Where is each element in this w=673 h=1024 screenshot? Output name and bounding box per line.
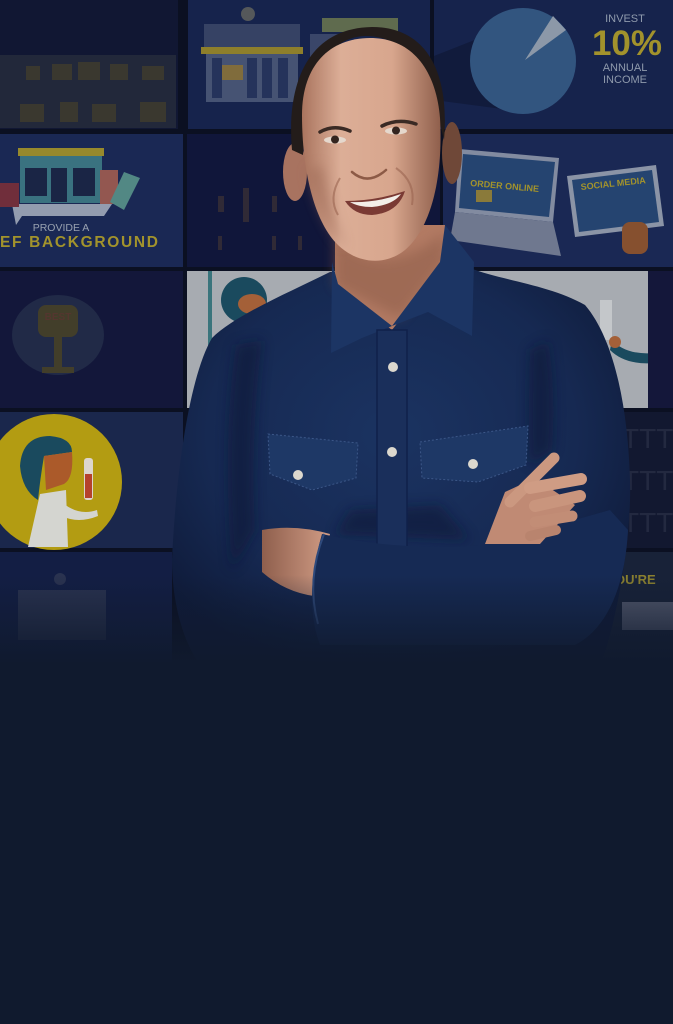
pocket left: [268, 434, 358, 490]
tile: right pattern: [620, 412, 673, 548]
placket: [377, 330, 407, 640]
tile: best rose trophy: BEST: [45, 312, 71, 323]
tile: order online and social media: SOCIAL MEDIA: [580, 175, 647, 192]
tile: you're: OU'RE: [615, 572, 656, 587]
neck: [335, 225, 445, 330]
tile: invest 10 percent: 10%: [592, 24, 662, 63]
crossed sleeve: [312, 510, 628, 645]
solid lower panel: [0, 665, 673, 1024]
nose: [352, 170, 386, 179]
shirt body: [172, 268, 630, 665]
tile: order online and social media: [443, 134, 673, 267]
tile: scientist on yellow circle: [0, 412, 183, 550]
tile: provide a brief background: [0, 134, 183, 267]
right hand: [485, 458, 581, 544]
tile: restaurant buildings: [188, 0, 430, 129]
tile: right pattern: TTT: [622, 507, 673, 538]
tile: invest 10 percent: INCOME: [603, 74, 647, 86]
left forearm hand: [262, 528, 330, 596]
collar left: [331, 262, 392, 353]
smile lines: [333, 168, 413, 215]
tile: light office scene: [187, 271, 673, 408]
eyes: [324, 126, 407, 144]
tile: you're: [600, 552, 673, 662]
hair: [291, 27, 445, 155]
tile: right pattern: TTT: [622, 465, 673, 496]
tile: right pattern: TTT: [622, 423, 673, 454]
tile: order online and social media: ORDER ONLINE: [470, 178, 539, 194]
bottom fade: [0, 575, 673, 665]
face: [302, 38, 441, 261]
snap buttons: [293, 362, 478, 480]
tile: invest 10 percent: [434, 0, 673, 129]
cheek shading: [308, 165, 345, 248]
ear right: [442, 122, 462, 184]
video tile wall: [0, 0, 673, 662]
man: [172, 27, 630, 665]
tile: invest 10 percent: ANNUAL: [603, 62, 647, 74]
tile: invest 10 percent: INVEST: [605, 13, 645, 25]
ear left: [283, 143, 307, 201]
tile: best rose trophy: [0, 271, 183, 408]
tile: faded building: [0, 552, 172, 662]
tile: provide a brief background: PROVIDE A: [33, 222, 89, 234]
tile: storefront row: [0, 0, 178, 129]
tile: provide a brief background: EF BACKGROUND: [0, 234, 158, 251]
neck shadow: [335, 232, 445, 318]
cuff line: [313, 534, 324, 624]
mouth smile: [345, 191, 405, 215]
arm fold shadows: [228, 340, 553, 570]
eyebrows: [320, 121, 416, 132]
pocket right: [420, 426, 528, 482]
collar right: [392, 225, 474, 336]
tile: dark center: [187, 134, 440, 267]
